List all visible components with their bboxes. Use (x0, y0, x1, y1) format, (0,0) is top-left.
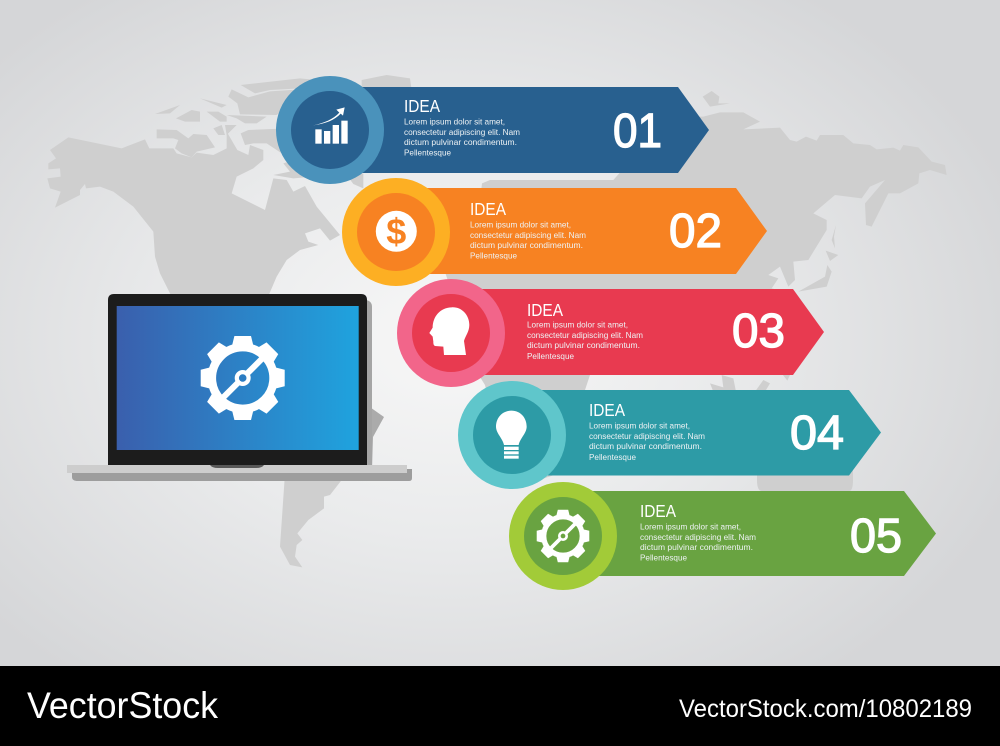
map: eurasia (450, 112, 947, 313)
body text 3: dictum pulvinar condimentum. (527, 340, 640, 350)
body text 1: consectetur adipiscing elit. Nam (404, 127, 520, 137)
heading 3: IDEA (527, 300, 563, 320)
circle 4 (458, 381, 566, 489)
body text 5: dictum pulvinar condimentum. (640, 542, 753, 552)
step 2: orange arrow (342, 178, 767, 286)
body text 5 (640, 522, 756, 562)
icon: dollar coin: $ (386, 211, 406, 252)
map: arctic islands (155, 75, 412, 188)
circle 3 (397, 279, 505, 387)
world map (47, 75, 947, 567)
step 3: red arrow (397, 279, 824, 387)
icon: light bulb (496, 411, 527, 459)
step 5: green arrow (509, 482, 936, 590)
number 05: 05 (850, 510, 902, 563)
icon: dollar coin (376, 211, 417, 252)
arrow band 2 (395, 188, 767, 274)
map: australia (757, 470, 853, 491)
body text 3 (527, 320, 643, 361)
arrow band 4 (510, 390, 881, 476)
laptop base (67, 465, 412, 481)
heading 4: IDEA (589, 400, 625, 420)
number 01: 01 (613, 105, 662, 158)
body text 2: Pellentesque (470, 250, 517, 260)
footer image id: VectorStock.com/10802189 (679, 695, 972, 723)
step 1: blue arrow (276, 76, 709, 184)
body text 2: consectetur adipiscing elit. Nam (470, 230, 586, 240)
footer bar (0, 666, 1000, 746)
number 03: 03 (732, 305, 785, 358)
number 02: 02 (669, 205, 722, 258)
body text 2: dictum pulvinar condimentum. (470, 240, 583, 250)
body text 3: Lorem ipsum dolor sit amet, (527, 320, 628, 330)
map: north america (47, 132, 340, 300)
body text 3: consectetur adipiscing elit. Nam (527, 330, 643, 340)
body text 5: Pellentesque (640, 552, 687, 562)
body text 5: Lorem ipsum dolor sit amet, (640, 522, 741, 532)
body text 5: consectetur adipiscing elit. Nam (640, 532, 756, 542)
circle 5 (509, 482, 617, 590)
icon: growth chart (313, 107, 348, 144)
circle 1 (276, 76, 384, 184)
laptop (67, 294, 412, 481)
map: southeast asia (710, 373, 790, 393)
arrow band 3 (450, 289, 824, 375)
body text 4: Lorem ipsum dolor sit amet, (589, 420, 690, 430)
heading 5: IDEA (640, 501, 676, 521)
laptop shadow (360, 300, 372, 470)
step 4: teal arrow (458, 381, 881, 489)
body text 4: dictum pulvinar condimentum. (589, 441, 702, 451)
laptop lid (108, 294, 367, 465)
icon: head (429, 307, 469, 355)
arrow band 1 (330, 87, 709, 173)
icon: gear (537, 510, 589, 562)
body text 2: Lorem ipsum dolor sit amet, (470, 220, 571, 230)
laptop screen (117, 306, 359, 450)
circle 2 (342, 178, 450, 286)
body text 2 (470, 220, 586, 260)
footer logo: VectorStock (27, 685, 218, 726)
map: south america (280, 400, 384, 567)
icon: gear on screen (201, 336, 285, 420)
heading 2: IDEA (470, 199, 506, 219)
body text 4: Pellentesque (589, 452, 636, 462)
body text 1: Lorem ipsum dolor sit amet, (404, 116, 505, 126)
body text 1: Pellentesque (404, 148, 451, 158)
body text 4 (589, 420, 705, 462)
body text 4: consectetur adipiscing elit. Nam (589, 431, 705, 441)
body text 1 (404, 116, 520, 158)
map: japan and pacific islands (703, 91, 838, 292)
body text 3: Pellentesque (527, 351, 574, 361)
arrow band 5 (560, 491, 936, 576)
map: africa (445, 272, 600, 488)
body text 1: dictum pulvinar condimentum. (404, 137, 517, 147)
heading 1: IDEA (404, 96, 440, 116)
number 04: 04 (790, 407, 844, 460)
